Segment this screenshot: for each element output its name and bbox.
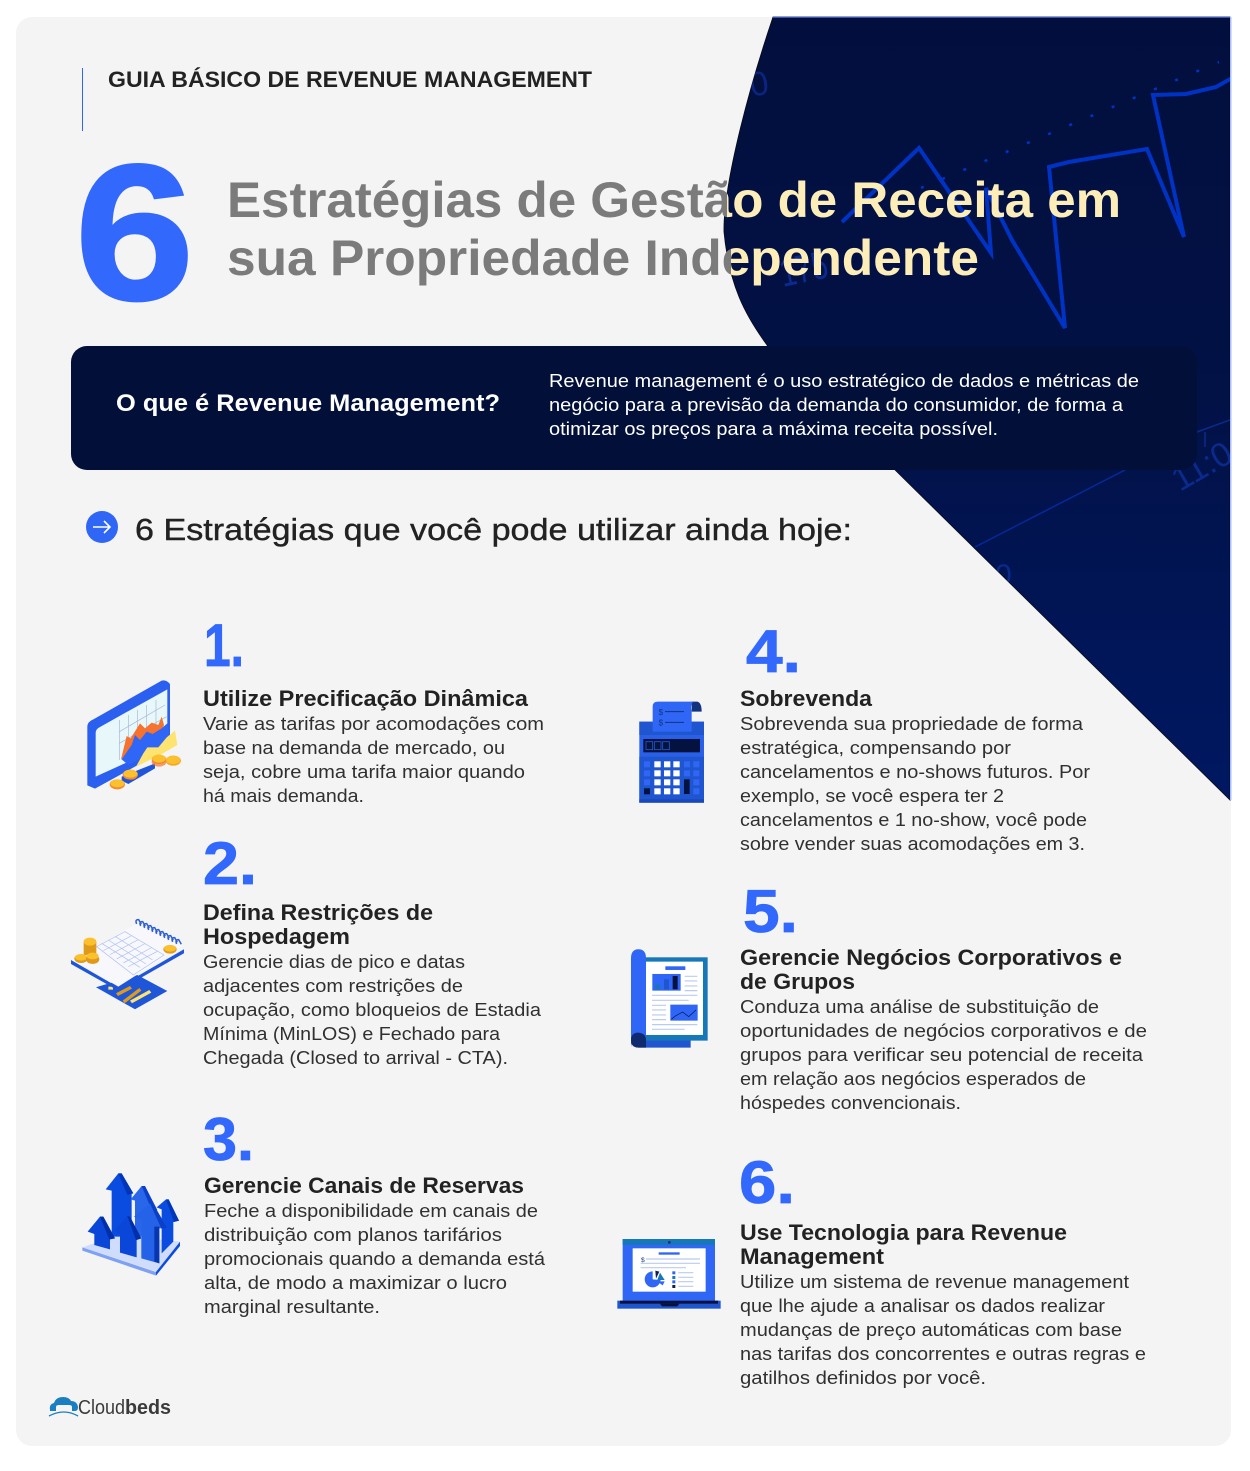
strategy 5: grupos para verificar seu potencial de receita [740,1045,1144,1065]
strategy 1: há mais demanda. [203,786,364,806]
icon: report document [631,949,708,1048]
strategy 1 [203,612,544,806]
strategy 3 [203,1106,546,1317]
strategy 5 [740,878,1147,1113]
strategy 4: exemplo, se você espera ter 2 [740,786,1004,806]
strategy 6: gatilhos definidos por você. [740,1368,986,1388]
dark chart background shape: 11:0 [1165,434,1239,499]
strategy 2: Mínima (MinLOS) e Fechado para [203,1024,501,1044]
icon: laptop: $ [641,1257,645,1264]
strategy 6: Use Tecnologia para Revenue [740,1220,1067,1245]
strategy 4: cancelamentos e no-shows futuros. Por [740,762,1090,782]
strategy 6: que lhe ajude a analisar os dados realizar [740,1296,1105,1316]
strategy 3: Feche a disponibilidade em canais de [204,1201,538,1221]
strategy 2: adjacentes com restrições de [203,976,463,996]
strategy 5: 5. [743,878,798,945]
strategy 5: oportunidades de negócios corporativos e de [740,1021,1147,1041]
dark chart background shape: 50 [728,64,772,108]
logo: Cloudbeds: Cloud [78,1397,125,1419]
strategy 2: Hospedagem [203,924,350,949]
strategy 4: Sobrevenda sua propriedade de forma [740,714,1084,734]
strategy 6: Utilize um sistema de revenue management [740,1272,1129,1292]
strategy 1: Varie as tarifas por acomodações com [203,714,544,734]
title [227,172,1121,286]
dark chart background shape: 0 [995,559,1012,592]
dark chart background shape [724,17,1239,800]
strategy 6 [739,1149,1146,1388]
strategy 1: 1. [204,612,244,679]
strategy 6: 6. [739,1149,795,1216]
strategy 5: em relação aos negócios esperados de [740,1069,1086,1089]
strategy 4: sobre vender suas acomodações em 3. [740,834,1085,854]
strategy 1: base na demanda de mercado, ou [203,738,505,758]
title: sua Propriedade Independente [227,230,979,286]
icon: calendar and coins [71,920,184,1009]
title: Estratégias de Gestão de Receita em [227,172,1121,228]
panel: definition: O que é Revenue Management? [116,390,500,417]
strategy 3: distribuição com planos tarifários [204,1225,502,1245]
header: GUIA BÁSICO DE REVENUE MANAGEMENT [108,67,593,92]
strategy 5: hóspedes convencionais. [740,1093,961,1113]
icon: calculator [639,702,704,803]
strategy 4: 4. [746,618,801,685]
strategy 5: de Grupos [740,969,855,994]
strategy 4: estratégica, compensando por [740,738,1011,758]
strategy 5: Gerencie Negócios Corporativos e [740,945,1122,970]
strategy 3: alta, de modo a maximizar o lucro [204,1273,507,1293]
strategy 1: Utilize Precificação Dinâmica [203,686,529,711]
strategy 3: Gerencie Canais de Reservas [204,1173,524,1198]
panel: definition [71,346,1197,470]
strategy 3: promocionais quando a demanda está [204,1249,546,1269]
dark chart background shape: 175 [776,243,832,296]
strategy 6: nas tarifas dos concorrentes e outras regras e [740,1344,1146,1364]
strategy 3: marginal resultante. [204,1297,380,1317]
icon: calculator: $ [659,719,664,728]
strategy 4: cancelamentos e 1 no-show, você pode [740,810,1087,830]
icon: calculator: $ [659,708,664,717]
strategy 6: mudanças de preço automáticas com base [740,1320,1122,1340]
icon: rising arrows [82,1173,180,1276]
strategy 2: Gerencie dias de pico e datas [203,952,465,972]
strategy 2: Chegada (Closed to arrival - CTA). [203,1048,508,1068]
logo: Cloudbeds: beds [125,1397,171,1419]
icon: monitor with chart [87,680,181,789]
strategy 2: 2. [203,830,257,897]
strategy 5: Conduza uma análise de substituição de [740,997,1099,1017]
strategy 1: seja, cobre uma tarifa maior quando [203,762,525,782]
strategy 2: ocupação, como bloqueios de Estadia [203,1000,542,1020]
strategy 4 [740,618,1090,854]
strategy 3: 3. [203,1106,254,1173]
logo: Cloudbeds [49,1397,171,1419]
section heading: 6 Estratégias que você pode utilizar ainda hoje: [135,512,852,547]
strategy 6: Management [740,1244,885,1269]
panel: definition: Revenue management é o uso estratégico de dados e métricas de [549,371,1139,391]
big number 6: 6 [74,124,194,342]
strategy 4: Sobrevenda [740,686,873,711]
icon: laptop [617,1239,721,1309]
panel: definition: otimizar os preços para a máxima receita possível. [549,419,998,439]
strategy 2: Defina Restrições de [203,900,433,925]
strategy 2 [203,830,542,1068]
panel: definition: negócio para a previsão da demanda do consumidor, de forma a [549,395,1124,415]
